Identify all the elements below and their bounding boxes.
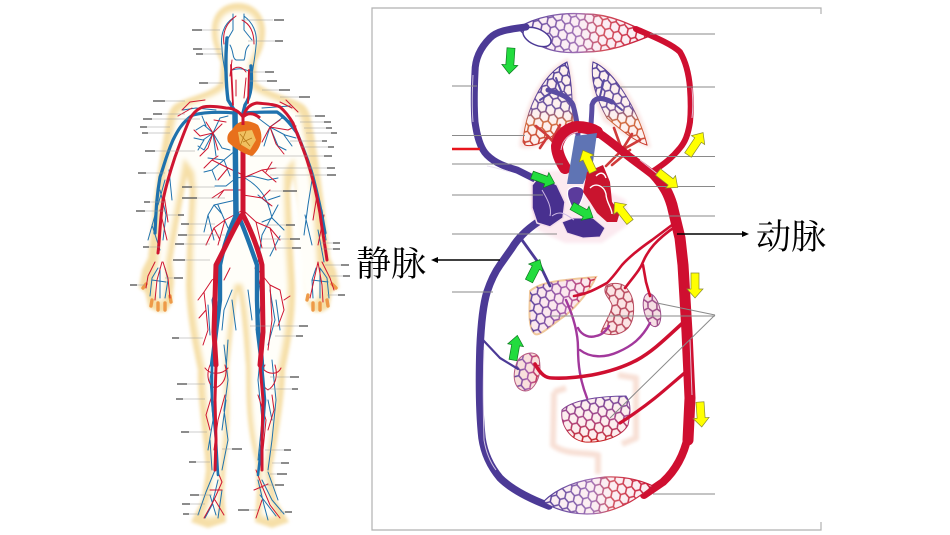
yellow arrow: down aorta xyxy=(653,166,683,194)
arrow: to vein label xyxy=(431,257,500,263)
yellow arrow: into left ventricle xyxy=(608,197,636,227)
capillary bed: spleen xyxy=(642,293,662,328)
pulmonary veins xyxy=(548,90,612,138)
thick leg veins xyxy=(212,215,236,365)
capillary bed: liver xyxy=(529,277,596,334)
thin red vessels xyxy=(146,16,334,518)
thick arm veins xyxy=(155,112,235,233)
thick leg arteries xyxy=(214,215,242,365)
vein: upper body xyxy=(474,27,537,180)
capillary bed: stomach xyxy=(601,283,634,335)
label: vein: 静脉 xyxy=(356,245,426,284)
capillary bed: left lung xyxy=(523,62,573,146)
yellow arrow: descending aorta lower xyxy=(692,401,710,427)
heart xyxy=(227,114,261,156)
vein: kidney xyxy=(483,340,518,369)
yellow arrow: descending aorta upper xyxy=(687,273,703,298)
finger tips xyxy=(143,284,336,310)
capillary bed: right lung xyxy=(592,62,647,145)
artery: aortic arch xyxy=(557,127,597,168)
heart: right ventricle xyxy=(562,218,605,238)
green arrow: into right ventricle xyxy=(568,199,597,225)
panel: circulation diagram frame xyxy=(372,8,821,530)
capillary bed: intestine xyxy=(562,396,630,442)
capillary bed: head xyxy=(518,14,652,53)
pale colon xyxy=(553,375,636,474)
artery: aorta to descending trunk xyxy=(594,130,657,178)
heart: superior vena cava xyxy=(567,133,597,184)
yellow arrow: up to head xyxy=(681,128,710,159)
artery: upper body xyxy=(636,29,691,172)
heart: right atrium xyxy=(532,175,565,227)
artery: kidney xyxy=(535,320,686,378)
panel: human body vascular figure xyxy=(130,3,350,528)
body silhouette xyxy=(139,3,339,528)
arrow: to artery label xyxy=(677,231,749,237)
organ halo: lungs and heart xyxy=(519,58,651,243)
green arrow: up from liver xyxy=(522,256,547,285)
red label line xyxy=(452,148,480,150)
thin blue vessels xyxy=(148,14,329,520)
pulmonary arteries xyxy=(536,125,640,166)
green arrow: up from kidney xyxy=(505,334,525,361)
vein: lower body xyxy=(479,222,549,506)
heart: left atrium and ventricle xyxy=(583,165,620,222)
white highlight lines in vessels xyxy=(472,75,693,470)
artery: intestine xyxy=(620,370,688,423)
green arrow: into right atrium xyxy=(529,167,557,191)
label: artery: 动脉 xyxy=(756,218,826,257)
artery: liver and stomach branches xyxy=(574,222,676,296)
vein: liver xyxy=(522,240,550,286)
green arrow: down from head xyxy=(501,47,519,74)
capillary bed: legs xyxy=(543,477,653,514)
leader lines xyxy=(452,34,715,494)
portal vein and branches xyxy=(566,300,650,398)
tiny illegible anatomy labels with leader lines xyxy=(130,20,350,514)
heart: valve xyxy=(567,186,584,208)
thick arm arteries xyxy=(158,106,243,253)
yellow arrow: out of heart xyxy=(576,147,600,175)
panel: circulation diagram xyxy=(452,14,715,514)
capillary bed: kidney xyxy=(514,353,540,391)
